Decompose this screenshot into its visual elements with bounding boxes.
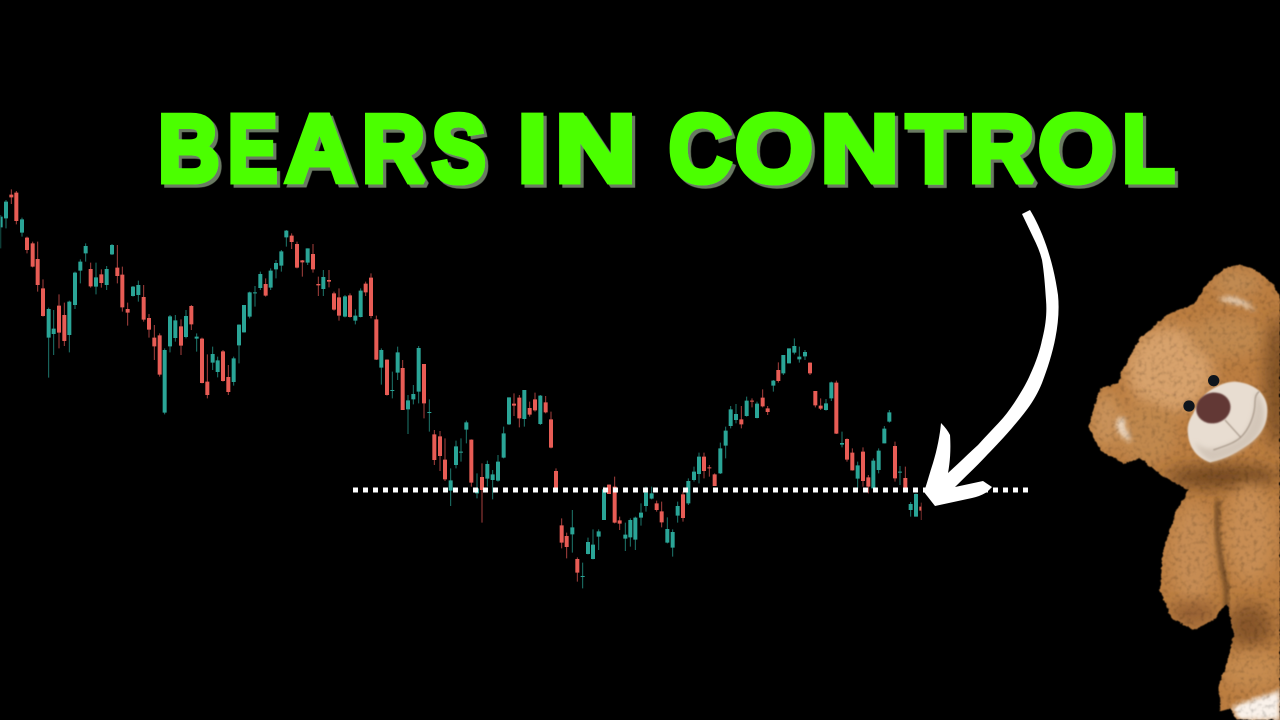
title: R <box>969 96 1034 202</box>
arm shadow line <box>1217 500 1227 607</box>
dotted support line <box>353 488 1028 492</box>
muzzle seam <box>1213 391 1259 450</box>
title: S <box>432 96 486 202</box>
title: R <box>362 96 425 202</box>
candles: middle section <box>403 346 699 588</box>
eye upper <box>1208 375 1219 386</box>
title: N <box>555 96 636 202</box>
candlestick chart <box>1 189 921 588</box>
title: L <box>1122 96 1175 202</box>
title <box>158 96 1175 202</box>
inner left ear <box>1116 417 1132 443</box>
title: N <box>820 96 899 202</box>
arrow <box>924 210 1059 506</box>
title: B <box>158 96 220 202</box>
eye lower <box>1183 400 1195 412</box>
title: T <box>906 96 962 202</box>
bear fur body <box>1088 265 1280 720</box>
title: E <box>228 96 278 202</box>
candles: right section <box>704 338 921 520</box>
title: O <box>735 96 813 202</box>
white foot <box>1232 690 1280 720</box>
title: A <box>285 96 354 202</box>
title: I <box>518 96 547 202</box>
candles: left section <box>1 189 398 414</box>
muzzle <box>1188 382 1267 462</box>
title: O <box>1038 96 1114 202</box>
muzzle shading <box>1195 392 1264 462</box>
fur shading <box>1127 327 1213 413</box>
nose <box>1193 389 1234 427</box>
teddy bear <box>1088 265 1280 720</box>
inner right ear <box>1217 297 1257 312</box>
title: C <box>669 96 732 202</box>
